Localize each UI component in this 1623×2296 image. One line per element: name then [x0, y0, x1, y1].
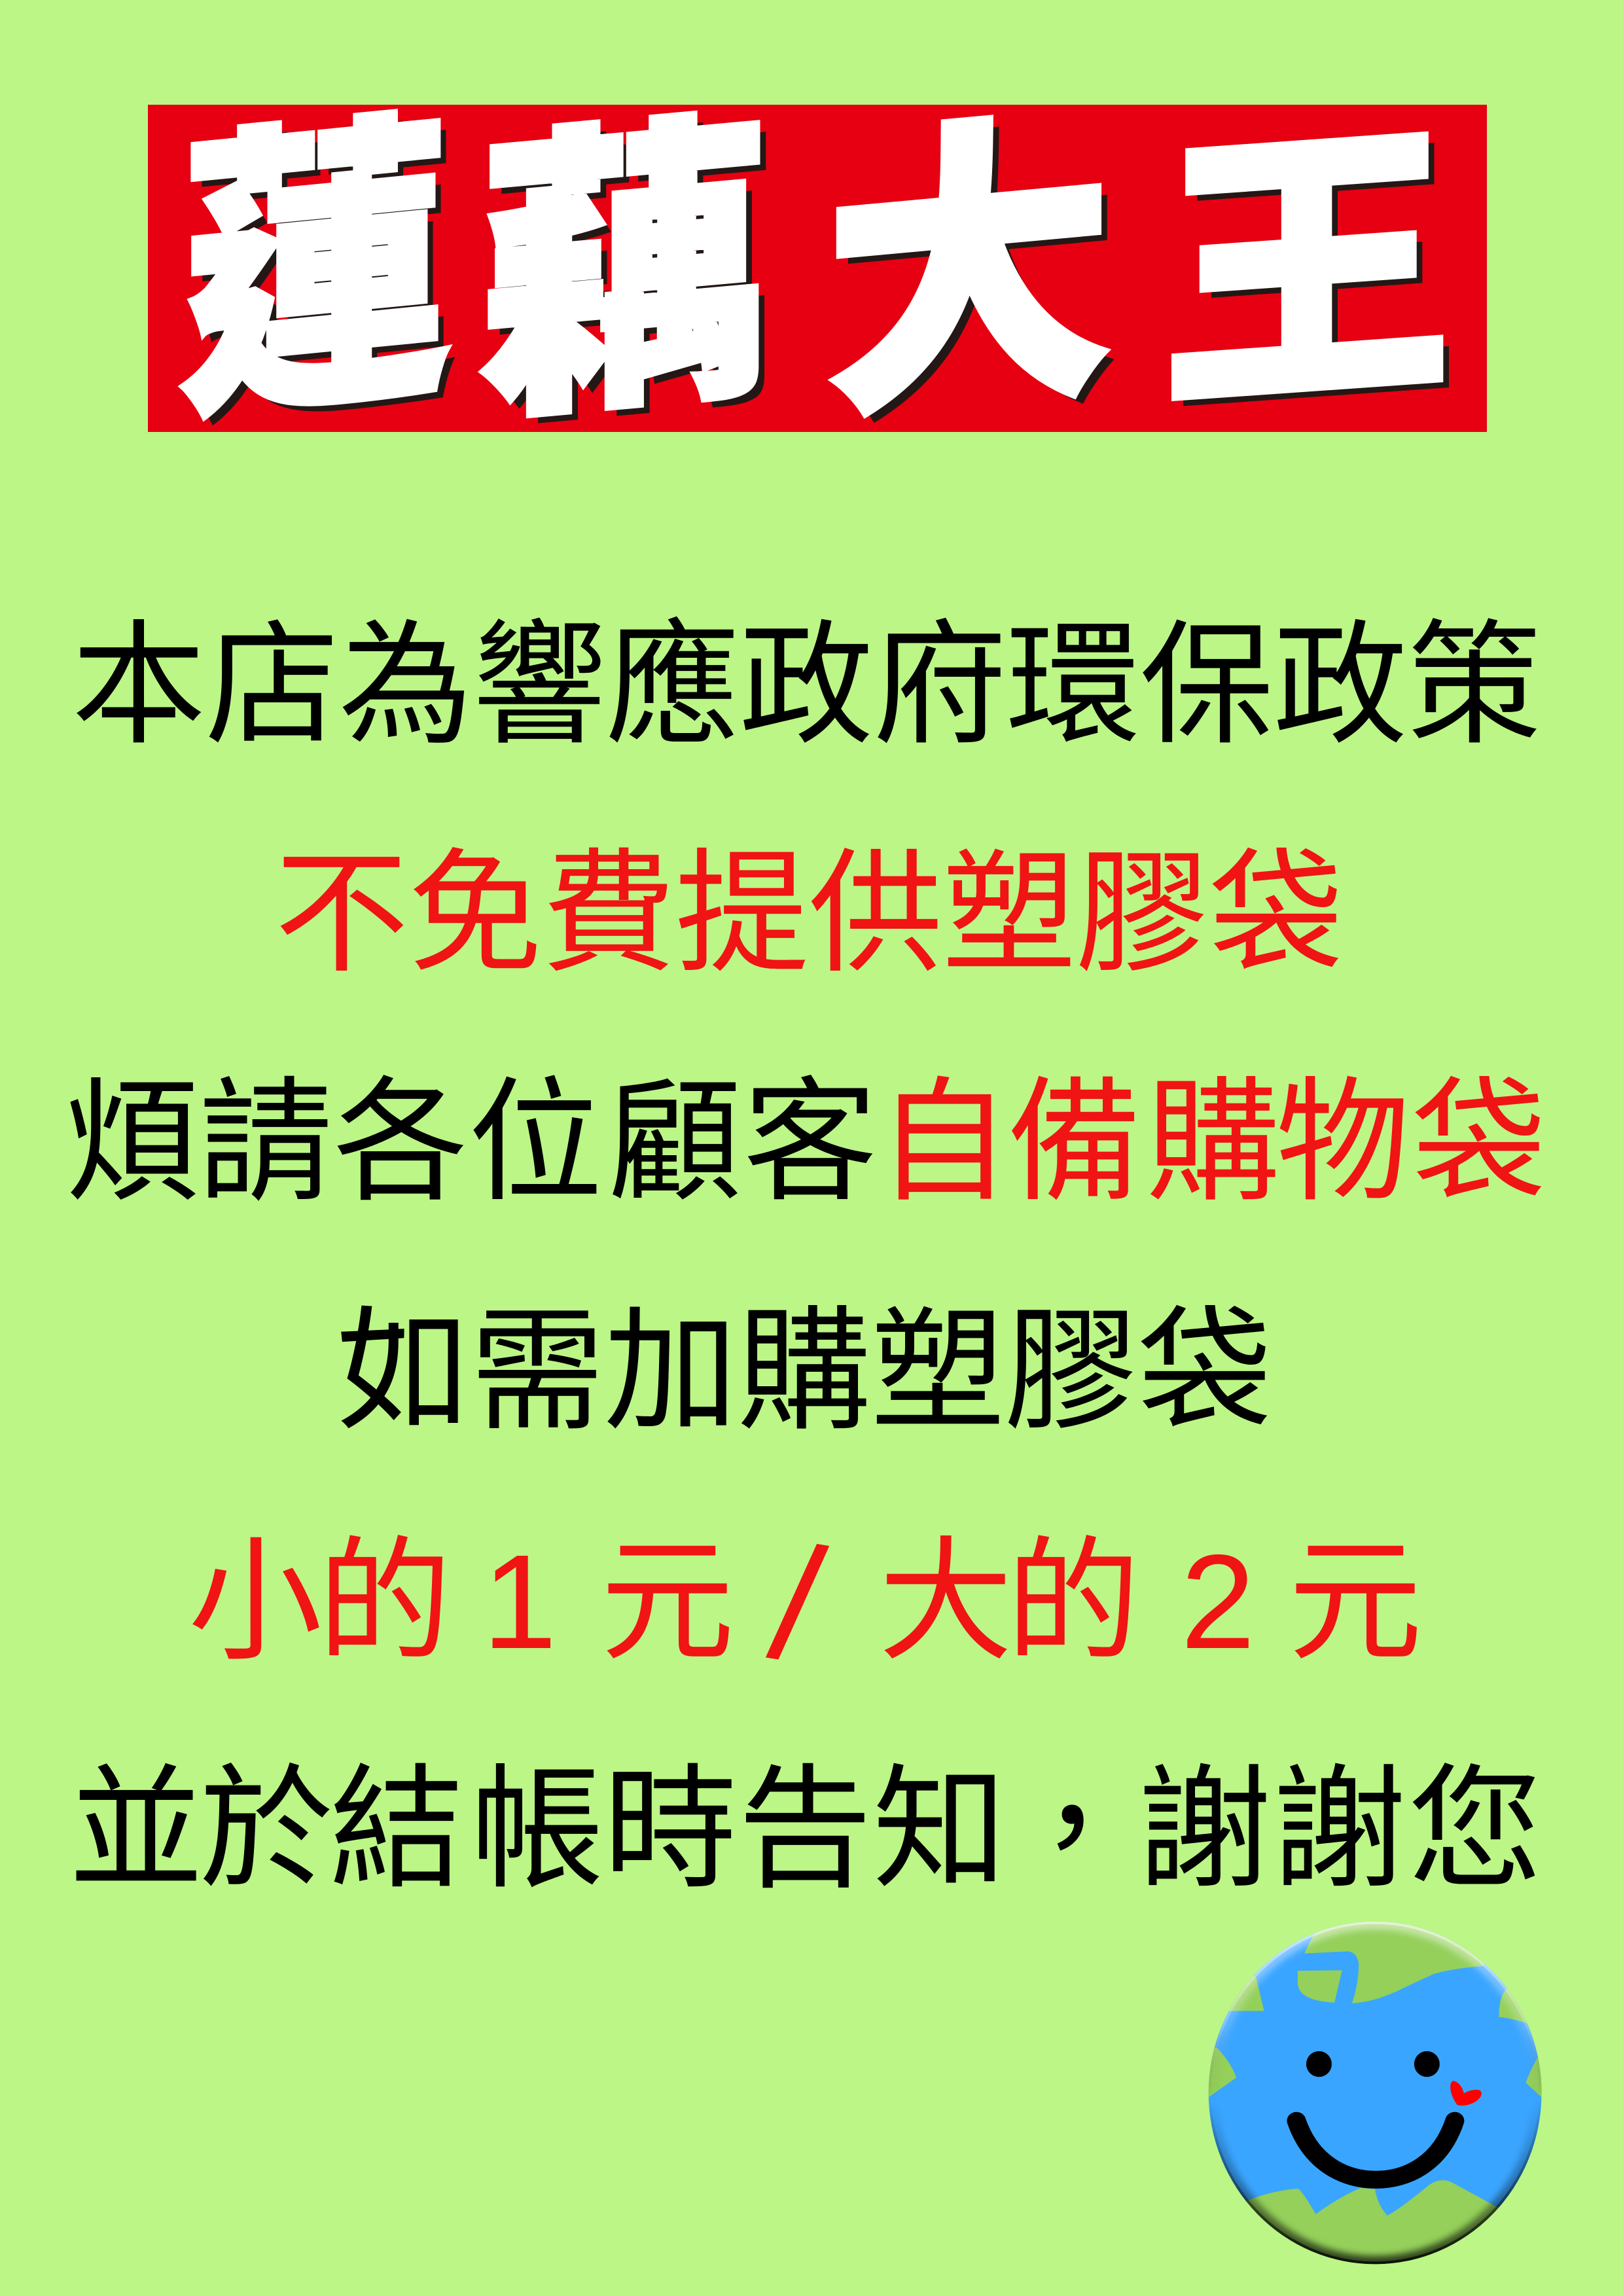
line 5: bag prices: /	[760, 1510, 834, 1697]
line 4: buying plastic bags: 如需加購塑膠袋	[336, 1297, 1272, 1446]
icon: eyes	[1306, 2051, 1440, 2077]
line 1: policy statement: 本店為響應政府環保政策	[72, 611, 1541, 761]
title banner	[148, 105, 1487, 432]
icon: smile	[1296, 2121, 1455, 2179]
line 3: bring your own bag: 煩請各位顧客	[65, 1067, 877, 1217]
icon: red heart	[1450, 2081, 1482, 2106]
line 2: no free plastic bags: 不免費提供塑膠袋	[275, 839, 1343, 989]
line 5: bag prices: 大的2元	[878, 1527, 1423, 1677]
line 5: bag prices: 小的1元	[188, 1527, 734, 1677]
line 6: inform at checkout, thanks: 並於結帳時告知，謝謝您	[69, 1755, 1542, 1905]
line 3: bring your own bag: 自備購物袋	[877, 1067, 1546, 1217]
icon: smiling earth badge	[1208, 1922, 1542, 2265]
